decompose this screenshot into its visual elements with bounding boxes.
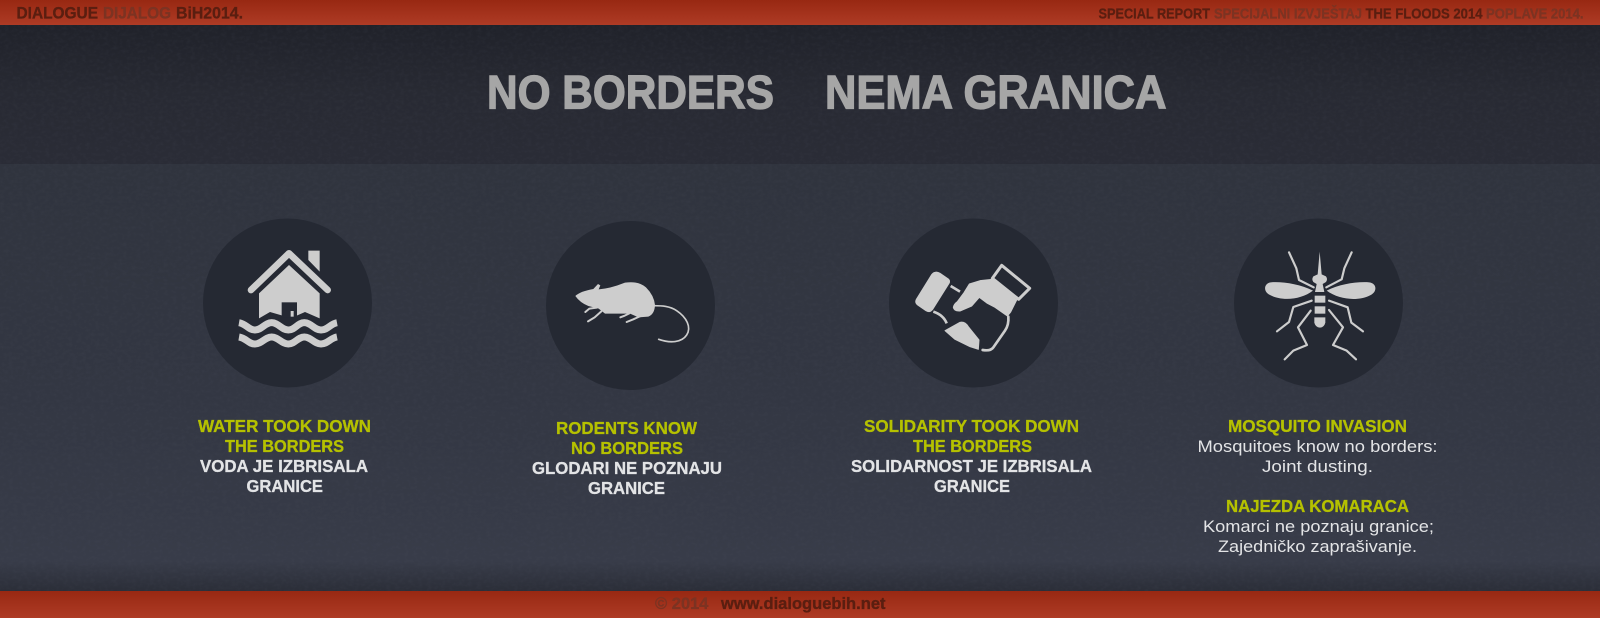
top bar left label: DIJALOG — [103, 4, 171, 22]
text: rodents know no borders: GLODARI NE POZNAJU — [532, 458, 722, 478]
panel: title band — [0, 25, 1600, 164]
text: mosquito invasion english and bosnian: Zajedničko zaprašivanje. — [1218, 537, 1417, 556]
icon: flooded house — [203, 218, 372, 388]
text: water took down the borders: WATER TOOK DOWN — [198, 416, 371, 436]
top bar right label: SPECIAL REPORT — [1098, 6, 1210, 22]
text: water took down the borders: VODA JE IZBRISALA — [200, 456, 368, 476]
top bar right label — [1098, 4, 1584, 22]
text: solidarity took down the borders: SOLIDARITY TOOK DOWN — [864, 416, 1079, 436]
text: mosquito invasion english and bosnian: NAJEZDA KOMARACA — [1226, 496, 1409, 516]
panel: water — [198, 218, 372, 496]
title — [487, 66, 1166, 120]
text: mosquito invasion english and bosnian — [1198, 416, 1438, 556]
icon: mosquito — [1234, 218, 1403, 388]
text: solidarity took down the borders: SOLIDARNOST JE IZBRISALA — [851, 456, 1092, 476]
title: NO BORDERS — [487, 66, 774, 120]
icon: rat — [546, 221, 715, 390]
top bar right label: THE FLOODS 2014 — [1366, 6, 1482, 22]
text: mosquito invasion english and bosnian: MOSQUITO INVASION — [1228, 416, 1407, 436]
text: rodents know no borders: GRANICE — [588, 478, 665, 498]
text: mosquito invasion english and bosnian: Komarci ne poznaju granice; — [1203, 517, 1434, 536]
panel: solidarity — [851, 218, 1092, 496]
text: water took down the borders: THE BORDERS — [225, 436, 344, 456]
footer url: www.dialoguebih.net — [720, 594, 886, 613]
top bar left label — [16, 4, 243, 22]
text: water took down the borders — [198, 416, 371, 496]
panel: rodents — [532, 221, 722, 498]
footer bar — [0, 591, 1600, 618]
text: mosquito invasion english and bosnian: Mosquitoes know no borders: — [1198, 437, 1438, 456]
text: rodents know no borders: NO BORDERS — [571, 438, 683, 458]
top bar right label: SPECIJALNI IZVJEŠTAJ — [1214, 4, 1362, 22]
title: NEMA GRANICA — [825, 66, 1166, 120]
footer copyright: © 2014 — [655, 594, 709, 613]
text: solidarity took down the borders: GRANICE — [934, 476, 1010, 496]
top bar — [0, 0, 1600, 25]
text: rodents know no borders: RODENTS KNOW — [556, 418, 697, 438]
panel: mosquito — [1198, 218, 1438, 556]
text: water took down the borders: GRANICE — [246, 476, 323, 496]
panel: main background — [0, 164, 1600, 591]
top bar left label: BiH2014. — [176, 4, 243, 22]
icon: handshake — [889, 218, 1058, 388]
text: mosquito invasion english and bosnian: Joint dusting. — [1262, 457, 1373, 476]
top bar left label: DIALOGUE — [16, 4, 98, 22]
text: rodents know no borders — [532, 418, 722, 498]
text: solidarity took down the borders: THE BORDERS — [913, 436, 1032, 456]
text: solidarity took down the borders — [851, 416, 1092, 496]
top bar right label: POPLAVE 2014. — [1486, 6, 1584, 22]
